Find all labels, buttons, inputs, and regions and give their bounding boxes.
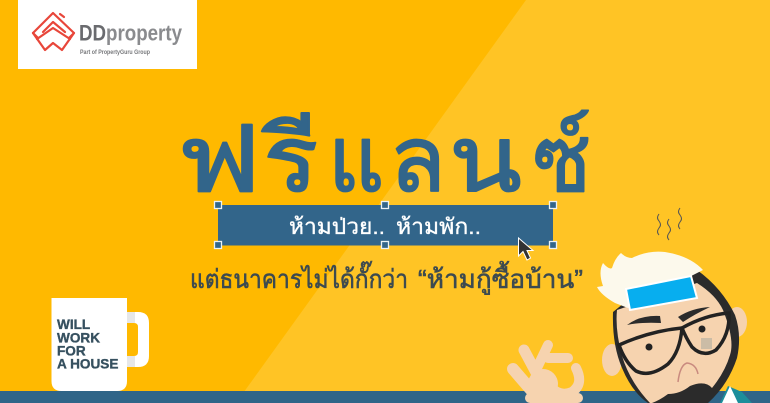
title: ล bbox=[390, 109, 446, 211]
face bbox=[617, 283, 731, 403]
background diagonal panel bbox=[236, 0, 770, 403]
ears bbox=[727, 307, 747, 337]
subtitle bbox=[190, 261, 583, 295]
logo wordmark: DDproperty bbox=[79, 20, 182, 46]
mug text: WORK bbox=[57, 330, 100, 346]
logo tagline: Part of PropertyGuru Group bbox=[80, 50, 150, 56]
selection handles bbox=[214, 202, 556, 248]
forehead ice pack bbox=[626, 276, 697, 310]
mug text: WILL bbox=[57, 317, 90, 332]
icon: mouse cursor bbox=[518, 238, 533, 260]
title: ซ์ bbox=[533, 108, 591, 211]
banner text bbox=[289, 214, 481, 239]
title bbox=[176, 107, 591, 212]
mouth bbox=[678, 363, 698, 382]
logo panel bbox=[18, 0, 197, 69]
character illustration bbox=[597, 252, 752, 403]
icon: DDproperty house logo bbox=[33, 13, 74, 50]
mug text: A HOUSE bbox=[57, 356, 118, 372]
bottom band bbox=[0, 391, 770, 403]
title: น bbox=[449, 109, 522, 211]
white hair bbox=[597, 252, 703, 308]
title: รี bbox=[261, 108, 318, 211]
banner text: ห้ามป่วย.. bbox=[289, 214, 385, 239]
subtitle: แต่ธนาคารไม่ได้กั๊กว่า bbox=[190, 261, 408, 294]
eyebrows bbox=[627, 316, 661, 325]
jacket bbox=[720, 386, 752, 403]
title: ฟ bbox=[176, 107, 261, 211]
icon: hand OK gesture bbox=[513, 345, 579, 399]
icon: stink lines bbox=[658, 208, 682, 240]
glasses bbox=[619, 313, 729, 373]
eye twitch bbox=[701, 338, 712, 349]
icon: coffee mug bbox=[52, 298, 149, 391]
banner selection box bbox=[214, 202, 556, 248]
title: แ bbox=[328, 109, 384, 212]
banner text: ห้ามพัก.. bbox=[396, 214, 481, 239]
mug text: FOR bbox=[57, 344, 86, 358]
eyes bbox=[646, 344, 652, 350]
subtitle: “ห้ามกู้ซื้อบ้าน” bbox=[418, 261, 583, 295]
hair and beard bbox=[613, 270, 739, 403]
